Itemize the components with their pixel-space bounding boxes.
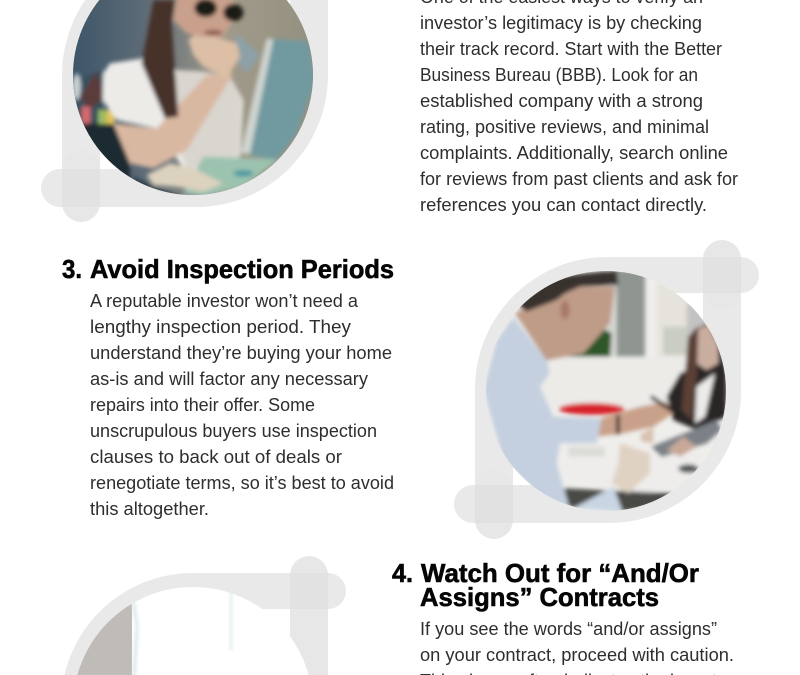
panel: section 4 photo frame [61,556,346,675]
text block: section 3 body: as-is and will factor any necessary [90,369,368,389]
frame bar ends [454,240,759,539]
frame inner cutout [193,609,290,675]
panel: section 3 photo frame [454,240,759,539]
text block: section 3 body: this altogether. [90,499,209,519]
frame shape [62,0,328,207]
text block: section 2 body: investor’s legitimacy is by checking [420,13,702,33]
text block: section 2 body: for reviews from past clients and ask for [420,169,738,189]
frame bar ends [41,150,141,222]
frame shape [61,573,328,675]
text block: section 2 body: their track record. Start with the Better [420,39,722,59]
frame bar ends [240,556,346,675]
text block: section 3 body: clauses to back out of deals or [90,447,342,467]
heading: section 3: Avoid Inspection Periods [90,254,394,284]
photo: woman thinking at a laptop [70,0,316,200]
text block: section 2 body: Business Bureau (BBB). Look for an [420,65,698,85]
text block: section 2 body: established company with a strong [420,91,703,111]
text block: section 2 body [420,0,738,215]
photo: bright blurred interior [70,585,316,675]
text block: section 3 body: A reputable investor won’t need a [90,291,359,311]
heading: section 4: Watch Out for “And/Or [421,558,699,588]
text block: section 3 body: understand they’re buying your home [90,343,392,363]
heading: section 4: 4. [392,558,413,588]
heading: section 3: 3. [62,254,82,284]
text block: section 3 body: repairs into their offer. Some [90,395,315,415]
frame inner cutouts [100,0,290,169]
text block: section 4 body: on your contract, proceed with caution. [420,645,734,665]
text block: section 3 body [90,291,394,519]
frame shape [475,257,741,523]
text block: section 4 body [420,619,734,675]
heading: section 4 [392,558,699,612]
photo: man and woman reviewing a clipboard [480,265,732,517]
text block: section 3 body: lengthy inspection period. They [90,317,351,337]
panel: section 2 photo frame [41,0,328,222]
text block: section 3 body: renegotiate terms, so it’s best to avoid [90,473,394,493]
text block: section 2 body: rating, positive reviews, and minimal [420,117,709,137]
text block: section 2 body: references you can contact directly. [420,195,707,215]
frame inner cutouts [513,293,703,485]
text block: section 3 body: unscrupulous buyers use inspection [90,421,377,441]
heading: section 4: Assigns” Contracts [420,582,659,612]
text block: section 4 body: If you see the words “and/or assigns” [420,619,717,639]
text block: section 2 body: complaints. Additionally, search online [420,143,728,163]
